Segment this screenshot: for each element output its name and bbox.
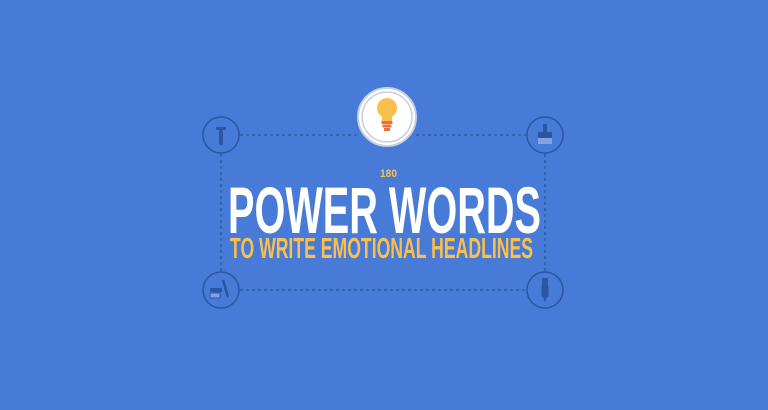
icon: marker (bottom-right) <box>527 272 563 308</box>
title: POWER WORDS: POWER WORDS <box>228 173 541 247</box>
icon: pencil & ruler (bottom-left) <box>203 272 239 308</box>
text: 180: 180 <box>380 168 397 180</box>
icon: light bulb <box>358 88 416 146</box>
icon: hammer (top-left) <box>203 117 239 153</box>
icon: paint brush (top-right) <box>527 117 563 153</box>
subtitle: TO WRITE EMOTIONAL HEADLINES <box>230 233 533 265</box>
